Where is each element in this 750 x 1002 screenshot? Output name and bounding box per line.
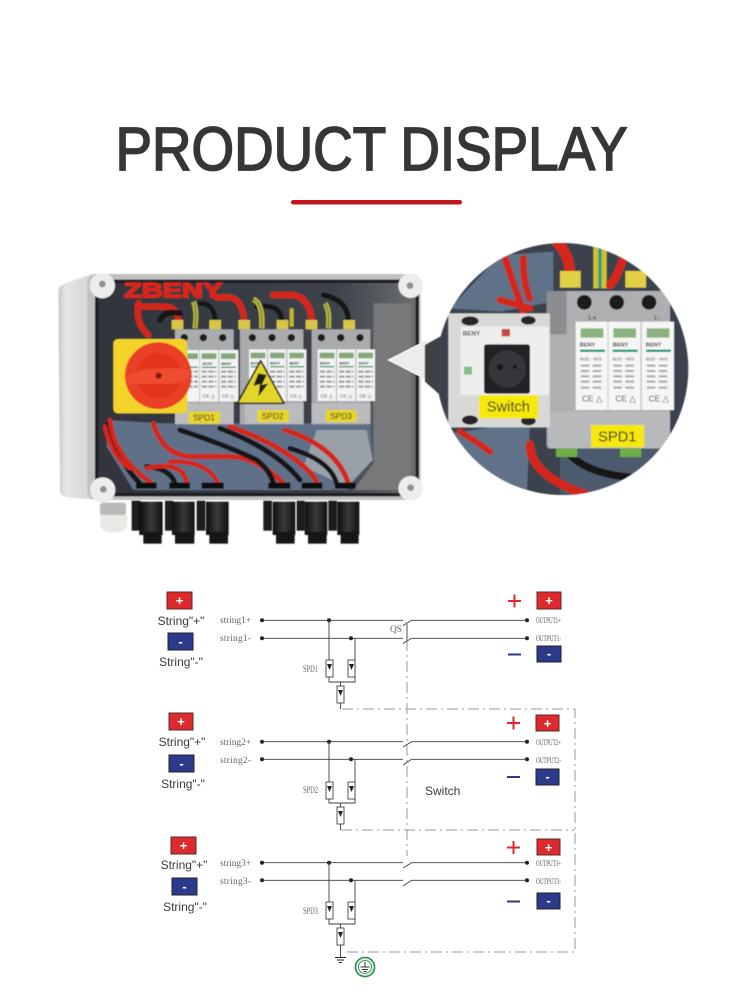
MC4 connectors (132, 501, 359, 544)
lens wires (460, 242, 653, 495)
circuit 3 labels: OUTPUT3- (536, 877, 561, 886)
left legend 2 (159, 713, 205, 791)
SPD2 module: BENY (251, 361, 261, 365)
circuit 2 labels: SPD2 (303, 786, 318, 796)
product photo: junction box (58, 273, 423, 544)
circuit 3 labels: SPD3 (303, 907, 318, 917)
metal bracket (303, 430, 373, 487)
wiring diagram (158, 592, 575, 976)
circuit 3 labels: OUTPUT3+ (536, 859, 561, 868)
right polarity markers 1 (508, 592, 561, 662)
SPD3 module: CE △ (321, 393, 333, 399)
title underline (291, 200, 462, 204)
left legend 1: - (178, 634, 183, 649)
icon: earth mark (356, 958, 374, 976)
right interior panel (353, 303, 412, 490)
SPD1 detail: BUD - 40/3 (646, 356, 668, 361)
circuit 1 labels: OUTPUT1+ (536, 616, 561, 625)
SPD2 module: BENY (289, 361, 300, 365)
lens bracket (425, 337, 453, 395)
left legend 3: String"+" (161, 858, 207, 872)
circuit 2 labels: string2+ (220, 738, 251, 748)
title: PRODUCT DISPLAY (116, 115, 628, 183)
circuit 2 lines (260, 740, 529, 830)
SPD1 detail: L+ (588, 313, 597, 322)
SPD1 module: BENY (221, 362, 232, 366)
top wiring (138, 295, 355, 335)
circuit 2 labels: string2- (220, 756, 251, 766)
SPD1 detail: CE △ (615, 394, 636, 404)
rotary switch (113, 339, 192, 413)
left legend 1: String"-" (159, 655, 203, 669)
SPD3 module: CE △ (359, 393, 372, 399)
circuit 1 labels: QS (390, 625, 402, 635)
SPD2 module: BENY (270, 361, 281, 365)
SPD1 label: SPD1 (598, 430, 636, 446)
switch detail (448, 313, 550, 427)
callout pointer (387, 340, 426, 380)
SPD1 detail: CE △ (582, 394, 603, 404)
bottom wiring (105, 420, 356, 489)
SPD1 module: CE △ (222, 393, 234, 399)
SPD2 module: SPD2 (262, 411, 284, 421)
left legend 2: - (179, 756, 184, 771)
left legend 3: String"-" (163, 900, 207, 914)
circuit 2 labels (220, 738, 561, 798)
SPD1 label (591, 425, 644, 447)
switch detail: BENY (463, 331, 481, 338)
Switch label (479, 395, 538, 418)
circuit 3 labels: string3- (220, 877, 251, 887)
circuit 1 labels: string1- (220, 634, 251, 644)
left legend 3: - (182, 879, 187, 894)
right polarity markers 2 (507, 715, 559, 785)
circuit 1 labels (220, 616, 561, 675)
cable gland (100, 503, 127, 532)
SPD3 module: BENY (359, 361, 369, 365)
mounting plate (107, 420, 373, 490)
left legend 1: String"+" (158, 614, 204, 628)
circuit 3 labels (220, 859, 561, 917)
warning triangle (237, 361, 284, 403)
SPD3 module: SPD3 (330, 411, 352, 421)
SPD1 detail (547, 291, 674, 457)
SPD1 detail: L- (654, 313, 661, 322)
SPD3 module (312, 329, 375, 424)
circuit 2 labels: Switch (425, 784, 460, 798)
right polarity markers 2: + (544, 716, 552, 731)
circuit 3 labels: string3+ (220, 859, 251, 869)
earth and switch dash-dot bus lines (341, 640, 575, 952)
left legend 2: + (177, 714, 185, 729)
circuit 2 labels: OUTPUT2+ (536, 738, 561, 747)
circuit 1 labels: string1+ (220, 616, 251, 626)
circuit 1 labels: SPD1 (303, 665, 318, 675)
left legend 2: String"-" (161, 777, 205, 791)
circuit 3 lines (260, 861, 529, 957)
left legend 3 (161, 837, 207, 914)
enclosure interior (97, 281, 417, 495)
SPD1 detail: BUD - 40/3 (580, 356, 602, 361)
SPD2 module (240, 329, 306, 424)
corner screws (90, 273, 423, 503)
ground symbol (335, 958, 346, 962)
Switch label: Switch (487, 400, 530, 416)
SPD1 module (175, 329, 238, 424)
right polarity markers 1: - (547, 646, 551, 661)
lens circle contents (433, 240, 693, 500)
SPD1 detail: BENY (646, 343, 662, 349)
right polarity markers 3: - (546, 893, 551, 908)
SPD1 detail: BENY (580, 343, 596, 349)
detail lens (425, 240, 693, 500)
circuit 2 labels: OUTPUT2- (536, 756, 561, 765)
SPD1 module: BENY (203, 362, 213, 366)
SPD1 detail: BUD - 40/3 (613, 356, 635, 361)
SPD1 detail: CE △ (649, 394, 670, 404)
left legend 3: + (180, 838, 188, 853)
left legend 2: String"+" (159, 735, 205, 749)
circuit 1 labels: OUTPUT1- (536, 634, 561, 643)
right polarity markers 2: - (545, 769, 550, 784)
SPD1 module: CE △ (203, 393, 215, 399)
right polarity markers 1: + (545, 593, 553, 608)
circuit 1 lines (260, 618, 529, 709)
left legend 1 (158, 592, 204, 669)
enclosure side (58, 274, 92, 499)
SPD1 detail: BENY (613, 343, 629, 349)
right polarity markers 3: + (545, 840, 553, 855)
right polarity markers 3 (507, 839, 560, 909)
left legend 1: + (176, 593, 184, 608)
SPD2 module: CE △ (290, 393, 302, 399)
SPD1 module: SPD1 (193, 413, 215, 423)
SPD3 module: BENY (339, 361, 350, 365)
brand logo: ZBENY (124, 279, 222, 303)
SPD3 module: BENY (320, 361, 331, 365)
SPD3 module: CE △ (340, 393, 352, 399)
enclosure lid frame (87, 274, 421, 500)
